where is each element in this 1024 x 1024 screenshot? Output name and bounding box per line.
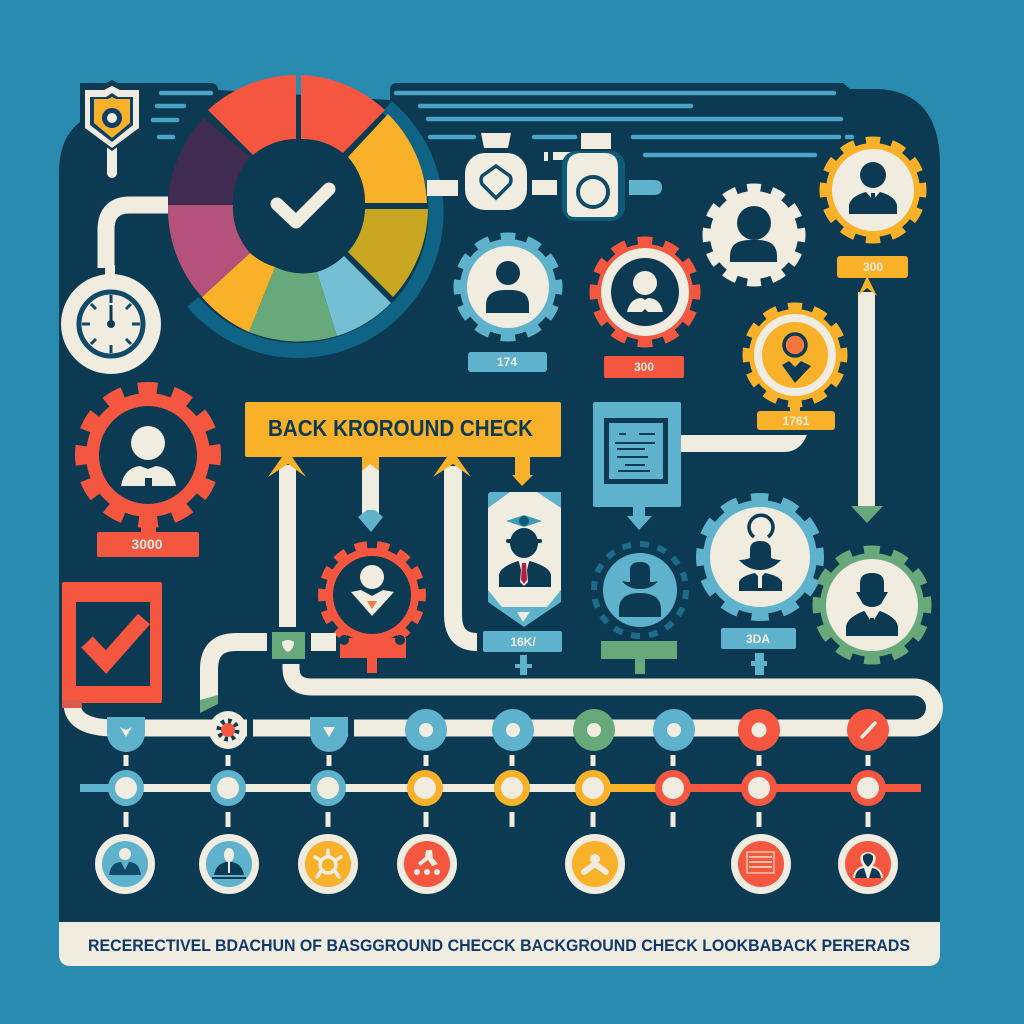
arrow: vertical up and down	[851, 276, 883, 523]
label: right yellow: 1761	[783, 414, 810, 428]
gear: yellow pin	[747, 307, 843, 412]
label: 3000: 3000	[131, 536, 163, 552]
gear: teal person	[458, 237, 558, 337]
label: 3000	[97, 532, 199, 557]
icon badge: teal suit	[199, 834, 259, 894]
panel: dark background	[59, 83, 940, 930]
stem under card	[515, 655, 532, 675]
card: person with cap	[488, 492, 561, 627]
gear: cream person	[707, 188, 801, 282]
timeline nodes row two	[112, 774, 882, 802]
icon: check mark	[277, 189, 329, 222]
footer: title strip: RECERECTIVEL BDACHUN OF BASGGROUND CHECCK BACKGROUND CHECK LOOKBABACK PERERADS	[88, 936, 910, 955]
label: 16K: 16K/	[510, 635, 536, 649]
label: 300 right	[837, 256, 908, 278]
connector: wheel to first lock	[427, 180, 458, 196]
gear: red person	[594, 241, 696, 343]
timeline nodes row one	[107, 709, 889, 752]
label: 300: 300	[634, 360, 654, 374]
arrow: up with bend	[433, 457, 477, 642]
label: green bar	[601, 641, 677, 674]
connector: teal end	[629, 180, 662, 195]
header lines left	[153, 93, 211, 137]
icon: shield with stem	[83, 80, 140, 178]
pipe: main timeline	[62, 664, 934, 728]
icon: red checkbox	[62, 582, 162, 703]
connector: document to gear	[681, 435, 807, 452]
arrow: down to red gear	[358, 457, 383, 532]
icon: clock	[61, 265, 161, 374]
icon: lock two	[562, 133, 625, 221]
timeline line row two	[80, 784, 921, 792]
connector: wheel to clock	[106, 205, 168, 268]
label: 16K	[483, 631, 562, 652]
arrow: down to card	[512, 457, 533, 486]
label: 3DA: 3DA	[746, 632, 770, 646]
label: right yellow	[757, 411, 835, 430]
label: 174: 174	[497, 355, 517, 369]
icon: lock one	[465, 133, 527, 210]
arc ring around wheel	[193, 107, 436, 351]
donut chart wheel	[168, 75, 428, 341]
icon badge: teal person	[95, 834, 155, 894]
icon badge: red list	[731, 834, 791, 894]
arrow: document down	[627, 507, 652, 530]
arrow: up one	[268, 457, 306, 627]
label: 300 right: 300	[863, 260, 883, 274]
gear: green person	[817, 550, 927, 660]
gear: small red person	[323, 546, 421, 673]
pipe: left bend	[200, 642, 267, 713]
gear: yellow person in suit	[824, 141, 922, 239]
connector: between locks	[532, 152, 573, 195]
icon badge: yellow star	[298, 834, 358, 894]
icon badge: red person	[838, 834, 898, 894]
gear: dashed teal hat	[594, 544, 686, 636]
label: 3DA	[721, 628, 796, 649]
connector: green square to red gear	[311, 633, 336, 651]
banner: background check: BACK KROROUND CHECK	[268, 415, 533, 441]
label: 174	[468, 352, 547, 372]
icon badge: red nodes	[397, 834, 457, 894]
connector ticks	[126, 755, 868, 827]
banner: background check	[245, 402, 561, 457]
label: 300	[604, 356, 684, 378]
header lines right	[396, 93, 852, 155]
gear: large red person	[81, 388, 215, 533]
icon badge: yellow branch	[565, 834, 625, 894]
icon: green square node	[272, 632, 305, 659]
footer: title strip	[59, 922, 940, 966]
document panel	[593, 402, 681, 507]
gear: large teal hat	[701, 498, 819, 616]
stem under teal label	[751, 653, 767, 675]
